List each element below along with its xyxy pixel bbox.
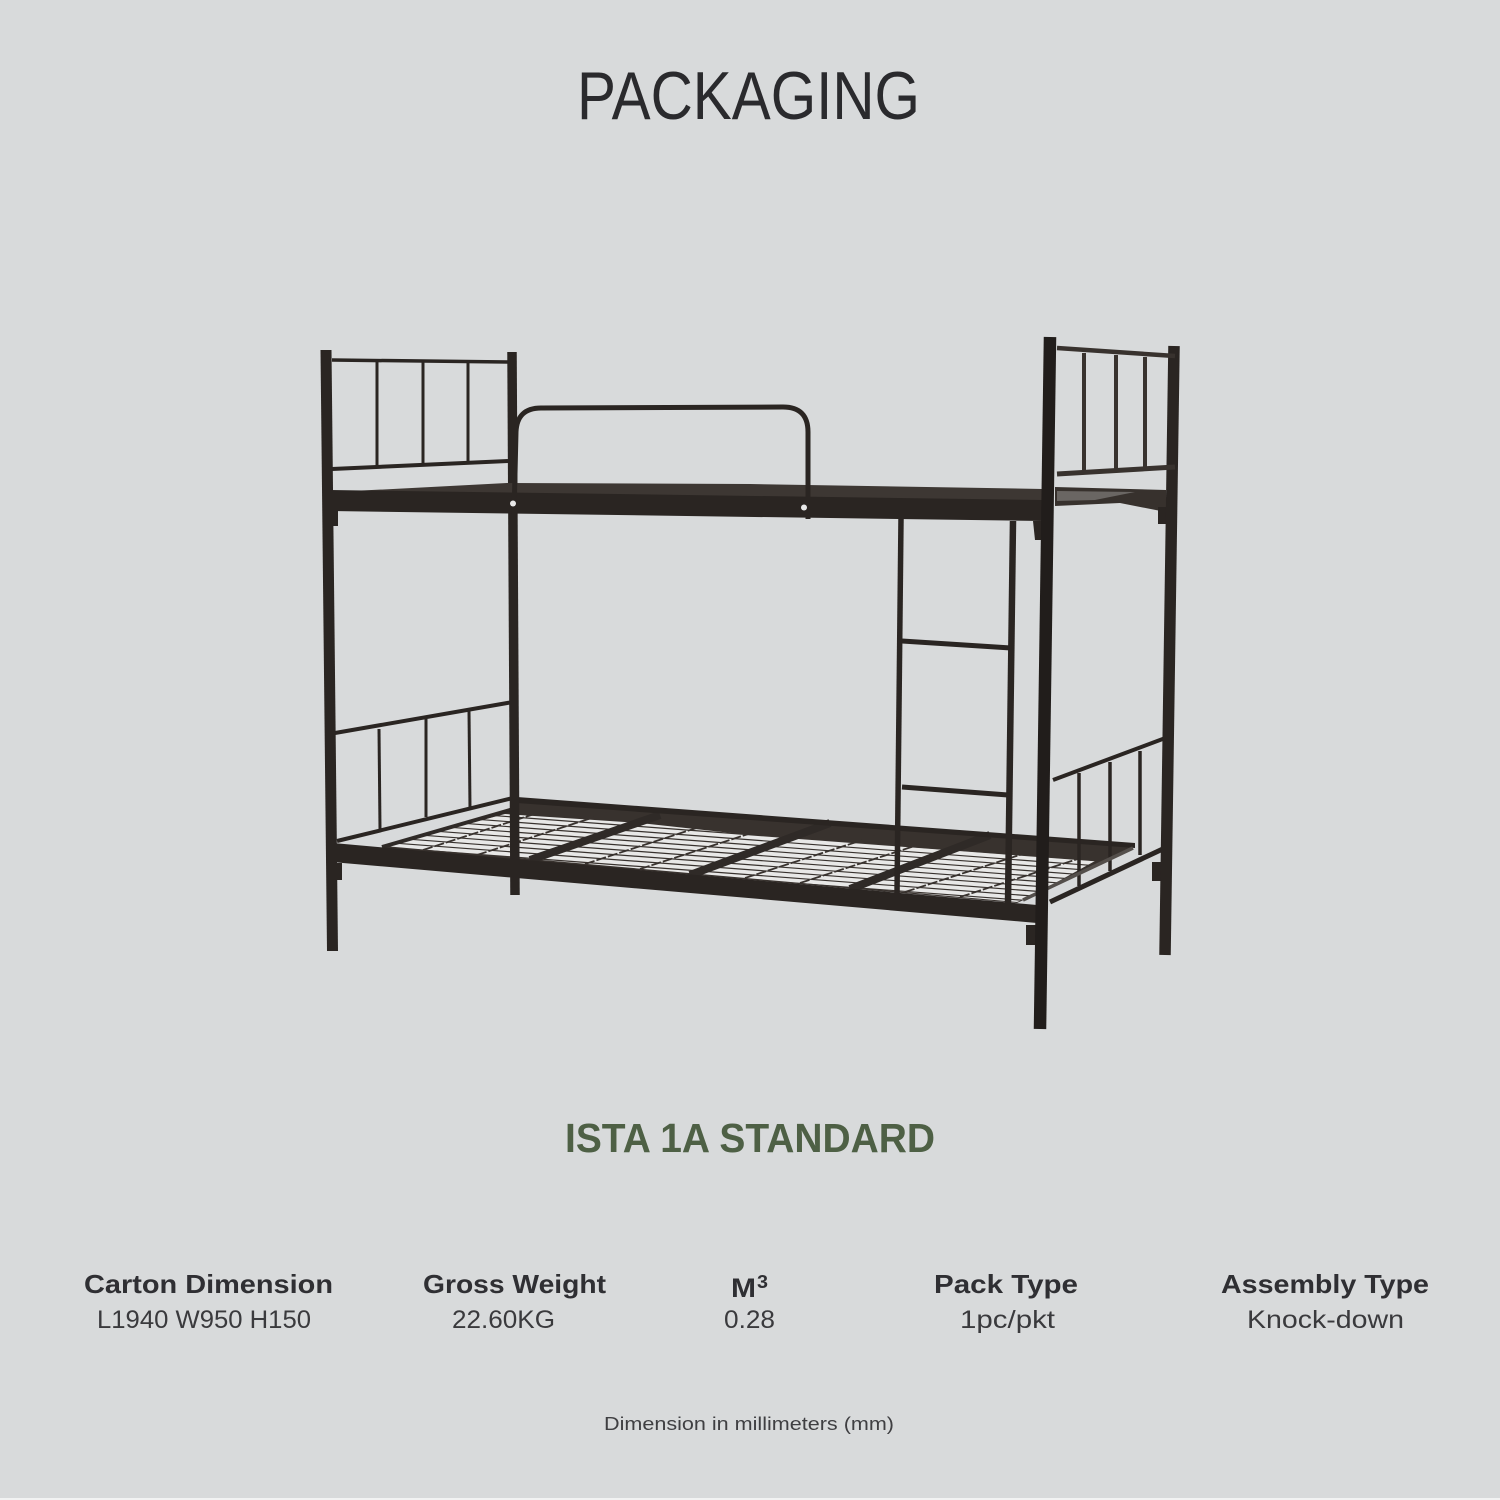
lower left bracket [333, 863, 342, 880]
mesh cross bands [530, 815, 990, 889]
label: superscript 3: 3 [757, 1272, 768, 1292]
product name: ISTA 1A STANDARD [565, 1115, 935, 1161]
right end lower panel [1023, 737, 1168, 902]
mesh inner left bar [382, 808, 517, 847]
footnote: Dimension in millimeters (mm) [604, 1414, 894, 1434]
lower bed front rail [333, 843, 1037, 923]
label: cubic metres: M [731, 1273, 756, 1303]
ladder [897, 519, 1013, 903]
lower right bracket [1026, 925, 1036, 945]
guard rail bolts [510, 500, 807, 510]
value: volume: 0.28 [724, 1306, 775, 1334]
lower left end panel [335, 702, 513, 841]
label: carton dimension: Carton Dimension [84, 1269, 333, 1299]
spec: pack type [934, 1269, 1078, 1334]
far right post [1165, 346, 1174, 955]
lower bed back rail [517, 797, 1135, 848]
mesh thin cross wires [423, 808, 1090, 897]
upper right highlight on frame [1057, 491, 1135, 501]
lower bed wire mesh [390, 814, 1095, 902]
front right post [1040, 337, 1050, 1029]
upper left bracket [330, 510, 338, 526]
value: assembly type: Knock-down [1247, 1306, 1404, 1334]
label: pack type: Pack Type [934, 1269, 1078, 1299]
upper right frame end [1055, 487, 1166, 512]
right end upper panel [1057, 348, 1175, 474]
far right lower bracket [1152, 862, 1162, 881]
guard rail [514, 407, 808, 519]
upper left end panel [332, 360, 508, 469]
title: PACKAGING [577, 58, 920, 134]
lower bed mesh base [382, 798, 1135, 903]
product image: metal bunk bed [300, 337, 1175, 1029]
far left post [326, 350, 332, 951]
label: gross weight: Gross Weight [423, 1269, 606, 1299]
spec: volume [724, 1272, 775, 1334]
value: pack type: 1pc/pkt [960, 1306, 1055, 1334]
label: assembly type: Assembly Type [1221, 1269, 1429, 1299]
spec: carton dimension [84, 1269, 333, 1334]
second left post [512, 352, 515, 895]
value: carton dimension: L1940 W950 H150 [97, 1306, 311, 1334]
upper right brackets [1033, 507, 1168, 540]
spec: assembly type [1221, 1269, 1429, 1334]
upper bed side rail [330, 490, 1043, 521]
spec: gross weight [423, 1269, 606, 1334]
upper bed surface [330, 483, 1043, 502]
value: gross weight: 22.60KG [452, 1306, 555, 1334]
